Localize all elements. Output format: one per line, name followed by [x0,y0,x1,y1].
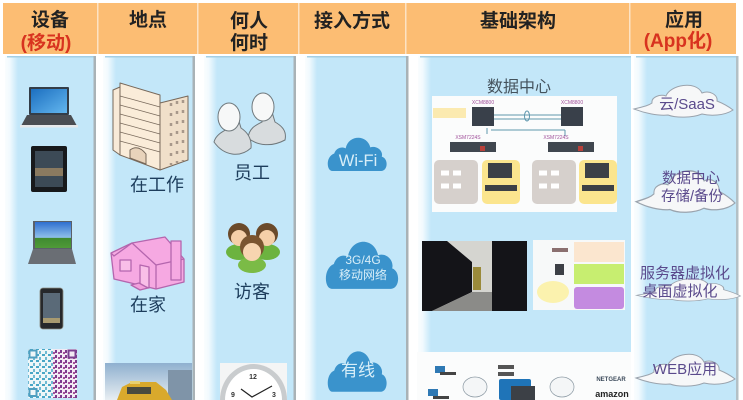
cloud: virtualization: 服务器虚拟化 [640,265,730,282]
cloud: data center storage [636,170,735,212]
diagram: network map [533,240,625,310]
heading: devices: 设备 [31,9,69,31]
panel: applications [634,56,740,400]
cloud: cloud SaaS [634,85,733,117]
cloud: web applications [636,354,735,386]
diagram: data center network: XSM7224S [543,135,569,141]
icon: laptop [20,87,78,128]
heading: mobile: (移动) [21,32,71,54]
label: data center: 数据中心 [487,78,551,96]
label: at work: 在工作 [130,175,184,195]
icon: QR code [28,349,77,398]
cloud: wired [328,351,387,392]
cloud: data center storage: 存储/备份 [661,188,724,205]
photo: taxi on street [105,363,192,400]
icon: employees [214,93,285,154]
cloud: cloud SaaS: 云/SaaS [659,96,715,113]
cloud: 3G/4G: 3G/4G [345,253,381,267]
cloud: web applications: WEB应用 [653,360,717,378]
diagram: data center network: XCM8800 [561,100,583,106]
label: at home: 在家 [130,295,166,315]
diagram: cloud storage network: NETGEAR [596,377,626,383]
header row [3,3,736,54]
icon: office building [113,83,188,170]
cloud: Wi-Fi: Wi-Fi [339,152,377,170]
heading: who when: 何人 [230,10,268,32]
cloud: data center storage: 数据中心 [662,170,720,187]
panel: infrastructure [417,56,631,400]
icon: tablet [31,146,67,192]
diagram: data center network [432,96,617,212]
panel: locations [103,56,195,400]
icon: clock [220,363,287,400]
icon: laptop with desktop [28,221,76,264]
heading: app: (App化) [644,30,712,52]
cloud: 3G/4G [326,242,398,289]
cloud: 3G/4G: 移动网络 [339,267,387,282]
panel: access methods [305,56,408,400]
icon: pink house [111,237,184,290]
photo: server room [422,241,527,311]
icon: visitors [226,223,280,273]
label: visitor: 访客 [234,282,270,302]
heading: when: 何时 [230,32,268,54]
cloud: Wi-Fi [328,138,387,171]
diagram: data center network: XCM8800 [472,100,494,106]
heading: application: 应用 [665,8,703,31]
icon: clock: 9 [231,392,235,399]
panel: people and time [204,56,296,400]
heading: location: 地点 [129,9,167,31]
diagram: cloud storage network [417,352,631,400]
heading: infrastructure: 基础架构 [480,10,556,32]
cloud: virtualization [636,265,740,301]
icon: phone [40,288,63,329]
diagram: data center network: XSM7224S [455,135,481,141]
panel: devices [5,56,96,400]
icon: clock: 3 [272,392,276,399]
label: employee: 员工 [234,163,270,183]
icon: clock: 12 [249,374,257,381]
heading: access method: 接入方式 [314,9,390,32]
cloud: virtualization: 桌面虚拟化 [642,283,718,300]
diagram: cloud storage network: amazon [595,389,629,399]
cloud: wired: 有线 [341,361,375,380]
